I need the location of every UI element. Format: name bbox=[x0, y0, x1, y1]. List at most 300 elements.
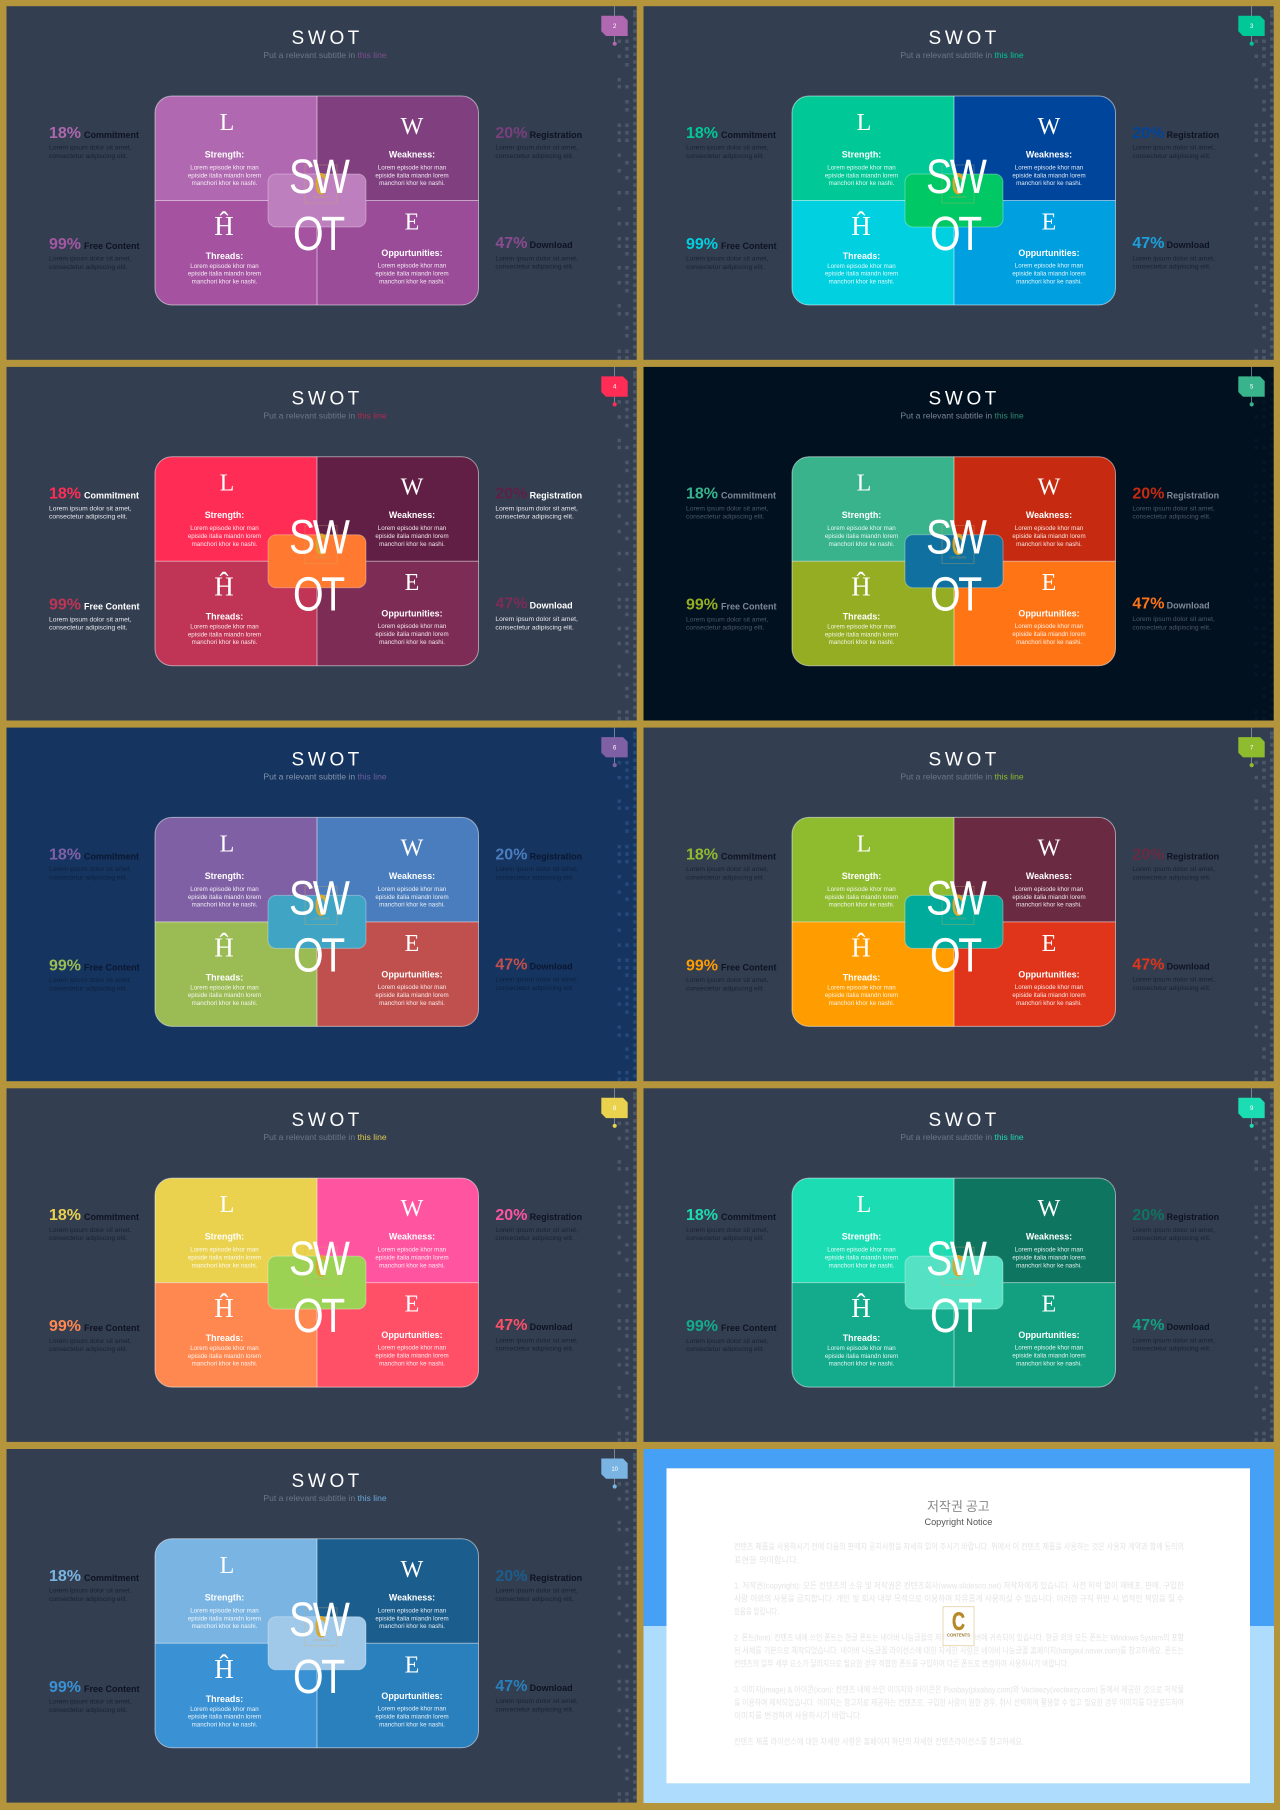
swot matrix bbox=[792, 1178, 1116, 1387]
stat: 18% commitment bbox=[686, 486, 776, 521]
stat: 20% registration: Lorem ipsum dolor sit amet, bbox=[1132, 145, 1215, 152]
weakness quadrant: episide italia miandn lorem bbox=[1012, 172, 1086, 180]
page tag 3 bbox=[1238, 6, 1265, 46]
stat: 18% commitment: Lorem ipsum dolor sit amet, bbox=[49, 866, 132, 873]
opportunities quadrant: episide italia miandn lorem bbox=[1012, 992, 1086, 999]
notice body: 을 이용하여 제작되었습니다. 이미지는 참고자료 제공하는 컨텐츠로, 구입한 사람이 원한 경우, 취사 선택하여 활용할 수 있고 필요한 경우 이미지를 다운로드하여 bbox=[734, 1697, 1184, 1707]
opportunities quadrant bbox=[375, 570, 449, 646]
big label: OT bbox=[293, 207, 344, 261]
weakness quadrant: W bbox=[401, 1196, 424, 1222]
stat: 47% download: 47% bbox=[1132, 956, 1164, 973]
logo: C bbox=[952, 529, 964, 562]
strength quadrant: Lorem episode khor man bbox=[190, 886, 259, 893]
strength quadrant: L bbox=[857, 110, 871, 136]
stat: 18% commitment: Commitment bbox=[721, 851, 776, 861]
threads quadrant: manchori khor ke nashi. bbox=[192, 278, 258, 286]
opportunities quadrant: manchori khor ke nashi. bbox=[379, 1721, 445, 1728]
stat: 18% commitment: Commitment bbox=[721, 1212, 776, 1222]
threads quadrant: Threads: bbox=[206, 1333, 243, 1343]
big label: SW bbox=[926, 872, 987, 925]
opportunities quadrant: Lorem episode khor man bbox=[378, 262, 447, 270]
strength quadrant: manchori khor ke nashi. bbox=[829, 541, 895, 548]
threads quadrant: Threads: bbox=[206, 612, 243, 622]
stat: 20% registration: Registration bbox=[530, 491, 582, 501]
strength quadrant: manchori khor ke nashi. bbox=[829, 902, 895, 909]
strength quadrant: L bbox=[220, 471, 234, 497]
swot matrix bbox=[792, 96, 1116, 305]
threads quadrant bbox=[825, 1293, 898, 1368]
threads quadrant: Ĥ bbox=[851, 572, 871, 602]
threads quadrant: Lorem episode khor man bbox=[827, 984, 896, 991]
strength quadrant: Lorem episode khor man bbox=[190, 164, 259, 172]
swot matrix bbox=[155, 457, 478, 666]
stat: 20% registration bbox=[495, 1568, 582, 1603]
weakness quadrant: manchori khor ke nashi. bbox=[379, 180, 445, 187]
weakness quadrant: Lorem episode khor man bbox=[1015, 525, 1084, 532]
stat: 99% free content bbox=[49, 236, 140, 271]
threads quadrant bbox=[188, 211, 261, 286]
stat: 47% download: Download bbox=[1167, 961, 1210, 971]
weakness quadrant: Weakness: bbox=[1026, 871, 1072, 881]
weakness quadrant: W bbox=[401, 835, 424, 861]
opportunities quadrant: Lorem episode khor man bbox=[378, 1705, 447, 1712]
stat: 47% download: Lorem ipsum dolor sit amet, bbox=[495, 255, 578, 262]
stat: 99% free content: Free Content bbox=[721, 602, 777, 612]
stat: 20% registration bbox=[495, 846, 582, 881]
stat: 99% free content bbox=[686, 1318, 777, 1353]
strength quadrant bbox=[825, 110, 898, 187]
stat: 18% commitment: consectetur adipiscing elit. bbox=[686, 514, 765, 521]
stat: 99% free content: Lorem ipsum dolor sit amet, bbox=[49, 616, 132, 623]
strength quadrant: manchori khor ke nashi. bbox=[192, 902, 258, 909]
strength quadrant: episide italia miandn lorem bbox=[188, 894, 261, 901]
threads quadrant: Threads: bbox=[843, 612, 880, 622]
stat: 47% download bbox=[495, 235, 578, 271]
stat: 18% commitment bbox=[49, 125, 139, 160]
opportunities quadrant bbox=[1012, 570, 1086, 646]
slide 5: dark multicolour bbox=[644, 367, 1274, 720]
notice body: 3. 이미지(image) & 아이콘(icon): 컨텐츠 내에 쓰인 이미지와 아이콘은 Pixabay(pixabay.com)와 Vecteezy(vecteezy.com) 등에서 제공한 것으로 저작물 bbox=[734, 1684, 1184, 1694]
weakness quadrant: episide italia miandn lorem bbox=[1012, 533, 1086, 540]
stat: 20% registration: consectetur adipiscing elit. bbox=[495, 874, 574, 881]
stat: 18% commitment: consectetur adipiscing elit. bbox=[686, 153, 765, 160]
weakness quadrant: manchori khor ke nashi. bbox=[379, 1623, 445, 1630]
threads quadrant: Ĥ bbox=[214, 1654, 234, 1684]
stat: 20% registration bbox=[1132, 1207, 1219, 1242]
big label: SW bbox=[289, 150, 350, 204]
stat: 99% free content: 99% bbox=[686, 236, 718, 253]
strength quadrant: L bbox=[220, 1553, 234, 1579]
stat: 18% commitment: Lorem ipsum dolor sit amet, bbox=[49, 505, 132, 512]
threads quadrant bbox=[825, 572, 898, 646]
logo badge: C bbox=[952, 1608, 965, 1636]
weakness quadrant: Weakness: bbox=[389, 510, 435, 520]
strength quadrant bbox=[188, 471, 261, 548]
stat: 99% free content bbox=[49, 1318, 140, 1353]
stat: 99% free content: Free Content bbox=[721, 1323, 777, 1333]
weakness quadrant: manchori khor ke nashi. bbox=[1016, 180, 1082, 187]
logo: C bbox=[315, 1250, 327, 1283]
stat: 20% registration: Registration bbox=[1167, 130, 1219, 140]
stat: 18% commitment: Lorem ipsum dolor sit amet, bbox=[686, 145, 769, 152]
stat: 18% commitment: consectetur adipiscing elit. bbox=[686, 874, 765, 881]
stat: 47% download bbox=[1132, 596, 1215, 631]
stat: 20% registration bbox=[1132, 125, 1219, 160]
weakness quadrant: Weakness: bbox=[1026, 150, 1072, 160]
strength quadrant: Strength: bbox=[842, 871, 881, 881]
opportunities quadrant: Lorem episode khor man bbox=[1015, 623, 1084, 630]
notice body bbox=[734, 1542, 1184, 1746]
stat: 18% commitment: Commitment bbox=[721, 491, 776, 501]
big label bbox=[289, 1232, 350, 1343]
weakness quadrant: W bbox=[401, 114, 424, 140]
logo bbox=[305, 526, 337, 564]
notice body: 2. 폰트(font): 컨텐츠 내에 쓰인 폰트는 한글 폰트는 네이버 나눔글꼴의 저작권은 네이버에 귀속되어 있습니다. 한글 외의 모든 폰트는 Windows System의 포함 bbox=[734, 1633, 1184, 1643]
center box bbox=[268, 535, 366, 588]
strength quadrant: Lorem episode khor man bbox=[827, 886, 896, 893]
strength quadrant: Strength: bbox=[842, 510, 881, 520]
weakness quadrant: Lorem episode khor man bbox=[1015, 886, 1084, 893]
stat: 18% commitment: Commitment bbox=[721, 130, 776, 140]
logo bbox=[942, 526, 974, 564]
page tag 4 bbox=[601, 367, 628, 406]
notice body: 컨텐츠 제품을 사용하시기 전에 다음의 판매자 공지사항을 자세히 읽어 주시기 바랍니다. 위에서 이 컨텐츠 제품을 사용하는 것은 사용자 계약과 함께 동의의 bbox=[734, 1542, 1184, 1552]
strength quadrant: Lorem episode khor man bbox=[827, 1247, 896, 1254]
stat: 18% commitment: Lorem ipsum dolor sit amet, bbox=[49, 1227, 132, 1234]
stat: 47% download: consectetur adipiscing elit. bbox=[1132, 1346, 1211, 1353]
center box bbox=[268, 1256, 366, 1309]
stat: 47% download bbox=[495, 596, 578, 631]
title: S W O T bbox=[292, 28, 360, 49]
stat: 18% commitment: Commitment bbox=[84, 130, 139, 140]
stat: 99% free content: 99% bbox=[49, 236, 81, 253]
logo bbox=[305, 1608, 337, 1646]
opportunities quadrant: Lorem episode khor man bbox=[378, 1345, 447, 1352]
stat: 99% free content bbox=[686, 597, 777, 632]
threads quadrant: Lorem episode khor man bbox=[827, 263, 896, 270]
threads quadrant: manchori khor ke nashi. bbox=[829, 1000, 895, 1007]
stat: 99% free content: consectetur adipiscing elit. bbox=[686, 1346, 765, 1353]
strength quadrant: L bbox=[220, 831, 234, 857]
strength quadrant: episide italia miandn lorem bbox=[188, 1615, 261, 1622]
big label bbox=[926, 150, 987, 261]
stat: 99% free content: 99% bbox=[49, 957, 81, 974]
subtitle: Put a relevant subtitle in this line bbox=[263, 411, 387, 421]
notice body: 이미지를 변경하여 사용하시기 바랍니다. bbox=[734, 1710, 862, 1720]
opportunities quadrant: episide italia miandn lorem bbox=[1012, 270, 1086, 278]
threads quadrant: Lorem episode khor man bbox=[190, 1706, 259, 1713]
strength quadrant bbox=[188, 110, 261, 187]
notice body: 된 서체를 기본으로 제작되었습니다. 네이버 나눔글꼴 라이선스에 대한 자세한 사항은 네이버 나눔글꼴 홈페이지(hangeul.naver.com)를 참고하세요. 폰트는 bbox=[734, 1646, 1184, 1656]
page tag 10: 10 bbox=[611, 1467, 619, 1473]
title: S W O T bbox=[292, 389, 360, 410]
weakness quadrant: Lorem episode khor man bbox=[378, 164, 447, 172]
center box bbox=[905, 895, 1003, 948]
notice body: 있음을 알립니다. bbox=[734, 1607, 779, 1617]
stat: 99% free content bbox=[49, 597, 140, 632]
stat: 47% download: consectetur adipiscing elit. bbox=[495, 264, 574, 271]
strength quadrant: manchori khor ke nashi. bbox=[192, 180, 258, 187]
page tag 7 bbox=[1238, 728, 1265, 767]
opportunities quadrant: Oppurtunities: bbox=[1018, 609, 1080, 619]
threads quadrant: Threads: bbox=[206, 251, 243, 261]
strength quadrant: episide italia miandn lorem bbox=[825, 894, 898, 901]
copyright notice slide bbox=[644, 1449, 1274, 1803]
stat: 99% free content bbox=[686, 236, 777, 271]
opportunities quadrant bbox=[375, 1292, 449, 1368]
weakness quadrant: episide italia miandn lorem bbox=[1012, 1255, 1086, 1262]
threads quadrant bbox=[188, 932, 261, 1007]
strength quadrant: Lorem episode khor man bbox=[190, 525, 259, 532]
big label: SW bbox=[289, 511, 350, 565]
stat: 18% commitment: 18% bbox=[49, 125, 81, 142]
page tag 8: 8 bbox=[613, 1106, 617, 1112]
opportunities quadrant: episide italia miandn lorem bbox=[375, 270, 449, 278]
stat: 47% download: Download bbox=[1167, 1322, 1210, 1332]
subtitle: Put a relevant subtitle in this line bbox=[900, 771, 1024, 781]
stat: 47% download: 47% bbox=[495, 956, 527, 973]
weakness quadrant: Weakness: bbox=[389, 1232, 435, 1242]
stat: 47% download: 47% bbox=[1132, 596, 1164, 613]
opportunities quadrant: Oppurtunities: bbox=[381, 248, 443, 258]
strength quadrant: Strength: bbox=[205, 1592, 244, 1602]
title: S W O T bbox=[929, 389, 997, 410]
opportunities quadrant bbox=[375, 931, 449, 1007]
weakness quadrant: Lorem episode khor man bbox=[378, 886, 447, 893]
stat: 20% registration: Registration bbox=[1167, 1212, 1219, 1222]
opportunities quadrant: manchori khor ke nashi. bbox=[379, 1000, 445, 1007]
strength quadrant: manchori khor ke nashi. bbox=[192, 1623, 258, 1630]
stat: 47% download: consectetur adipiscing elit. bbox=[1132, 264, 1211, 271]
opportunities quadrant: episide italia miandn lorem bbox=[375, 992, 449, 999]
swot matrix bbox=[155, 817, 478, 1026]
threads quadrant: manchori khor ke nashi. bbox=[829, 278, 895, 286]
stat: 18% commitment bbox=[686, 846, 776, 881]
big label: OT bbox=[293, 1650, 344, 1704]
white card bbox=[666, 1468, 1250, 1783]
stat: 99% free content: consectetur adipiscing elit. bbox=[49, 625, 128, 632]
strength quadrant: L bbox=[220, 1192, 234, 1218]
stat: 20% registration: 20% bbox=[495, 1207, 527, 1224]
strength quadrant: Strength: bbox=[205, 510, 244, 520]
stat: 99% free content: Free Content bbox=[84, 1684, 140, 1694]
logo: CONTENTS bbox=[313, 556, 329, 560]
opportunities quadrant: Lorem episode khor man bbox=[1015, 262, 1084, 270]
title: S W O T bbox=[292, 1471, 360, 1492]
stat: 99% free content: Free Content bbox=[84, 1323, 140, 1333]
opportunities quadrant: E bbox=[1042, 931, 1056, 957]
slide 9: teal bbox=[644, 1088, 1274, 1442]
opportunities quadrant: episide italia miandn lorem bbox=[375, 1353, 449, 1360]
stat: 18% commitment: 18% bbox=[49, 486, 81, 503]
threads quadrant: manchori khor ke nashi. bbox=[192, 1000, 258, 1007]
opportunities quadrant: manchori khor ke nashi. bbox=[1016, 1000, 1082, 1007]
weakness quadrant: W bbox=[1038, 1196, 1061, 1222]
title: S W O T bbox=[929, 1110, 997, 1131]
strength quadrant: episide italia miandn lorem bbox=[825, 533, 898, 540]
logo: C bbox=[315, 889, 327, 922]
notice body: 사람 이외의 사용을 금지합니다. 개인 및 회사 내부 목적으로 이용하여 자유롭게 사용하실 수 있습니다. 이러한 규칙 위반 시 법적인 책임을 질 수 bbox=[734, 1594, 1184, 1604]
logo: C bbox=[315, 529, 327, 562]
weakness quadrant: W bbox=[1038, 835, 1061, 861]
stat: 47% download: Lorem ipsum dolor sit amet, bbox=[495, 616, 578, 623]
strength quadrant bbox=[825, 831, 898, 909]
weakness quadrant: manchori khor ke nashi. bbox=[1016, 541, 1082, 548]
logo: CONTENTS bbox=[950, 556, 966, 560]
slide 4: red bbox=[6, 367, 637, 720]
stat: 47% download: Lorem ipsum dolor sit amet, bbox=[1132, 255, 1215, 262]
opportunities quadrant: E bbox=[1042, 1292, 1056, 1318]
stat: 99% free content: 99% bbox=[686, 597, 718, 614]
weakness quadrant: W bbox=[401, 1557, 424, 1583]
big label bbox=[289, 150, 350, 261]
slide 2: purple bbox=[6, 6, 637, 360]
stat: 20% registration: Lorem ipsum dolor sit amet, bbox=[495, 1588, 578, 1595]
strength quadrant: episide italia miandn lorem bbox=[825, 172, 898, 180]
weakness quadrant: Lorem episode khor man bbox=[378, 1247, 447, 1254]
stat: 20% registration: Registration bbox=[530, 1212, 582, 1222]
stat: 18% commitment: consectetur adipiscing elit. bbox=[49, 514, 128, 521]
opportunities quadrant bbox=[375, 210, 449, 286]
opportunities quadrant: Oppurtunities: bbox=[381, 1330, 443, 1340]
stat: 20% registration: Lorem ipsum dolor sit amet, bbox=[495, 1227, 578, 1234]
threads quadrant: manchori khor ke nashi. bbox=[829, 639, 895, 646]
stat: 18% commitment: consectetur adipiscing elit. bbox=[49, 153, 128, 160]
stat: 18% commitment: 18% bbox=[686, 1207, 718, 1224]
stat: 18% commitment: Lorem ipsum dolor sit amet, bbox=[686, 866, 769, 873]
stat: 20% registration bbox=[495, 486, 582, 521]
stat: 99% free content: 99% bbox=[49, 597, 81, 614]
stat: 47% download bbox=[1132, 235, 1215, 271]
stat: 20% registration: consectetur adipiscing elit. bbox=[495, 1596, 574, 1603]
subtitle: Put a relevant subtitle in this line bbox=[263, 1493, 387, 1503]
swot matrix bbox=[792, 457, 1116, 666]
strength quadrant: manchori khor ke nashi. bbox=[829, 1262, 895, 1269]
stat: 20% registration: Lorem ipsum dolor sit amet, bbox=[495, 505, 578, 512]
stat: 99% free content bbox=[686, 957, 777, 992]
weakness quadrant: Weakness: bbox=[389, 1592, 435, 1602]
threads quadrant: Threads: bbox=[843, 251, 880, 261]
strength quadrant bbox=[825, 471, 898, 548]
strength quadrant bbox=[188, 1553, 261, 1630]
slide 8: yellow pink bbox=[6, 1088, 637, 1442]
stat: 99% free content: consectetur adipiscing elit. bbox=[686, 625, 765, 632]
big label bbox=[289, 1593, 350, 1704]
page tag 8 bbox=[601, 1088, 628, 1128]
threads quadrant: episide italia miandn lorem bbox=[188, 992, 261, 999]
stat: 18% commitment: 18% bbox=[49, 1207, 81, 1224]
center box bbox=[905, 174, 1003, 227]
stat: 99% free content: consectetur adipiscing elit. bbox=[49, 1346, 128, 1353]
stat: 99% free content: 99% bbox=[49, 1318, 81, 1335]
stat: 47% download: Download bbox=[530, 1322, 573, 1332]
weakness quadrant: Lorem episode khor man bbox=[1015, 1247, 1084, 1254]
stat: 47% download: Lorem ipsum dolor sit amet, bbox=[1132, 1337, 1215, 1344]
opportunities quadrant: manchori khor ke nashi. bbox=[1016, 278, 1082, 286]
swot matrix bbox=[155, 96, 478, 305]
threads quadrant bbox=[825, 932, 898, 1007]
stat: 18% commitment: Commitment bbox=[84, 1573, 139, 1583]
weakness quadrant bbox=[375, 114, 449, 187]
page tag 7: 7 bbox=[1250, 745, 1254, 751]
threads quadrant: Lorem episode khor man bbox=[827, 1345, 896, 1352]
stat: 20% registration bbox=[1132, 846, 1219, 881]
center box bbox=[905, 535, 1003, 588]
opportunities quadrant: Oppurtunities: bbox=[381, 969, 443, 979]
big label bbox=[926, 511, 987, 622]
stat: 47% download: 47% bbox=[495, 1317, 527, 1334]
stat: 18% commitment: consectetur adipiscing elit. bbox=[49, 1235, 128, 1242]
strength quadrant: L bbox=[857, 1192, 871, 1218]
stat: 99% free content: consectetur adipiscing elit. bbox=[49, 985, 128, 992]
stat: 20% registration: Lorem ipsum dolor sit amet, bbox=[495, 145, 578, 152]
threads quadrant: manchori khor ke nashi. bbox=[829, 1361, 895, 1368]
big label: OT bbox=[293, 568, 344, 622]
strength quadrant: L bbox=[220, 110, 234, 136]
opportunities quadrant: episide italia miandn lorem bbox=[1012, 1353, 1086, 1360]
threads quadrant bbox=[825, 211, 898, 286]
strength quadrant: episide italia miandn lorem bbox=[188, 533, 261, 540]
opportunities quadrant: Oppurtunities: bbox=[1018, 1330, 1080, 1340]
opportunities quadrant: manchori khor ke nashi. bbox=[1016, 639, 1082, 646]
opportunities quadrant: episide italia miandn lorem bbox=[375, 1713, 449, 1720]
threads quadrant: Ĥ bbox=[214, 211, 234, 241]
opportunities quadrant: E bbox=[405, 570, 419, 596]
threads quadrant: episide italia miandn lorem bbox=[188, 631, 261, 638]
opportunities quadrant: Lorem episode khor man bbox=[378, 623, 447, 630]
threads quadrant: Ĥ bbox=[851, 1293, 871, 1323]
opportunities quadrant: episide italia miandn lorem bbox=[1012, 631, 1086, 638]
threads quadrant: episide italia miandn lorem bbox=[188, 1714, 261, 1721]
weakness quadrant: W bbox=[1038, 475, 1061, 501]
big label: OT bbox=[293, 929, 344, 982]
strength quadrant: L bbox=[857, 831, 871, 857]
center box bbox=[268, 1617, 366, 1670]
stat: 47% download: consectetur adipiscing elit. bbox=[495, 624, 574, 631]
logo badge bbox=[943, 1607, 974, 1646]
page tag 2: 2 bbox=[613, 24, 617, 30]
notice body: 1. 저작권(copyright): 모든 컨텐츠의 소유 및 저작권은 컨텐츠회사(www.slidesco.net) 저작자에게 있습니다. 사전 허락 없이 재배포, 판매, 구입한 bbox=[734, 1581, 1184, 1591]
big label: SW bbox=[926, 150, 987, 204]
threads quadrant: manchori khor ke nashi. bbox=[192, 1721, 258, 1728]
stat: 20% registration: Lorem ipsum dolor sit amet, bbox=[1132, 866, 1215, 873]
weakness quadrant bbox=[1012, 1196, 1086, 1269]
stat: 47% download bbox=[495, 956, 578, 992]
opportunities quadrant: E bbox=[405, 1652, 419, 1678]
stat: 18% commitment: 18% bbox=[49, 846, 81, 863]
stat: 99% free content bbox=[49, 957, 140, 992]
logo bbox=[305, 1247, 337, 1285]
threads quadrant: Ĥ bbox=[214, 572, 234, 602]
slide 10: blue bbox=[6, 1449, 637, 1803]
opportunities quadrant: Lorem episode khor man bbox=[378, 984, 447, 991]
stat: 18% commitment: consectetur adipiscing elit. bbox=[49, 874, 128, 881]
threads quadrant: Ĥ bbox=[214, 932, 234, 962]
stat: 20% registration: Lorem ipsum dolor sit amet, bbox=[1132, 505, 1215, 512]
stat: 99% free content: 99% bbox=[686, 1318, 718, 1335]
threads quadrant: Threads: bbox=[843, 1333, 880, 1343]
logo bbox=[942, 886, 974, 924]
big label: OT bbox=[930, 1289, 981, 1343]
strength quadrant bbox=[188, 831, 261, 909]
swot matrix bbox=[792, 817, 1116, 1026]
opportunities quadrant: Oppurtunities: bbox=[381, 609, 443, 619]
logo bbox=[305, 886, 337, 924]
strength quadrant: L bbox=[857, 471, 871, 497]
subtitle: Put a relevant subtitle in this line bbox=[263, 50, 387, 60]
threads quadrant: episide italia miandn lorem bbox=[825, 271, 898, 278]
page tag 4: 4 bbox=[613, 385, 617, 391]
